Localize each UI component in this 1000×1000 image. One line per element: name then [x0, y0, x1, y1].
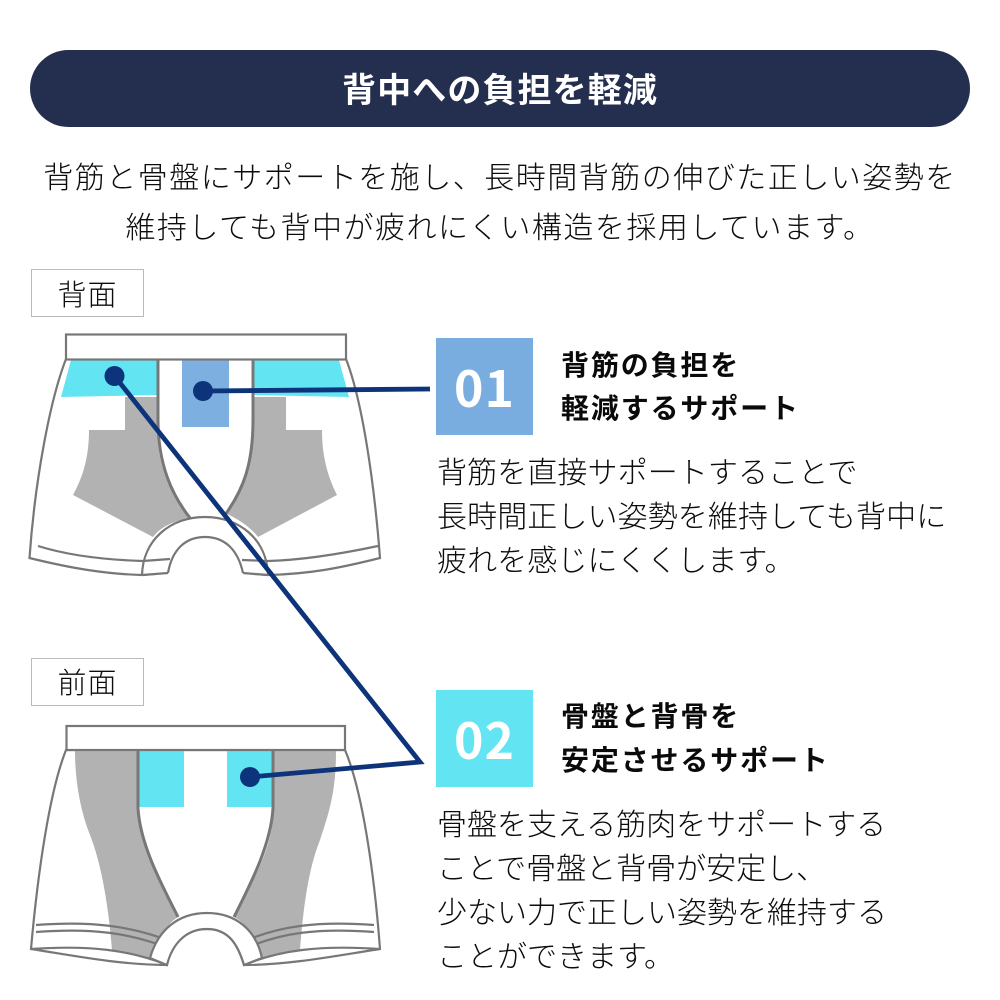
text 01: 背筋を直接サポートすることで [437, 448, 858, 492]
text 02: 骨盤を支える筋肉をサポートする [437, 800, 886, 844]
label: back view: 背面 [57, 272, 118, 314]
heading 01: 軽減するサポート [561, 387, 800, 427]
heading 02: 骨盤と背骨を [561, 695, 740, 735]
text 01 [437, 448, 946, 580]
intro text: 背筋と骨盤にサポートを施し、長時間背筋の伸びた正しい姿勢を [43, 153, 957, 197]
heading 02 [561, 695, 830, 778]
intro text [43, 153, 957, 247]
text 02: ことができます。 [437, 932, 674, 976]
title banner [30, 50, 970, 127]
label: front view: 前面 [57, 660, 118, 702]
title banner: 背中への負担を軽減 [342, 63, 658, 112]
diagram: back view shorts [30, 334, 380, 575]
text 02: ことで骨盤と背骨が安定し、 [437, 844, 826, 888]
text 01: 疲れを感じにくくします。 [437, 536, 795, 580]
diagram: front view shorts [31, 726, 380, 965]
badge 01 [436, 338, 533, 435]
badge 02: 02 [454, 702, 515, 774]
text 01: 長時間正しい姿勢を維持しても背中に [437, 492, 946, 536]
connector lines [104, 366, 430, 787]
heading 02: 安定させるサポート [561, 738, 830, 778]
heading 01 [561, 344, 800, 427]
text 02: 少ない力で正しい姿勢を維持する [437, 888, 887, 932]
badge 02 [436, 690, 533, 787]
heading 01: 背筋の負担を [561, 344, 740, 384]
label: front view [31, 658, 144, 706]
intro text: 維持しても背中が疲れにくい構造を採用しています。 [125, 203, 875, 247]
badge 01: 01 [454, 350, 515, 422]
text 02 [437, 800, 887, 976]
label: back view [31, 269, 144, 317]
